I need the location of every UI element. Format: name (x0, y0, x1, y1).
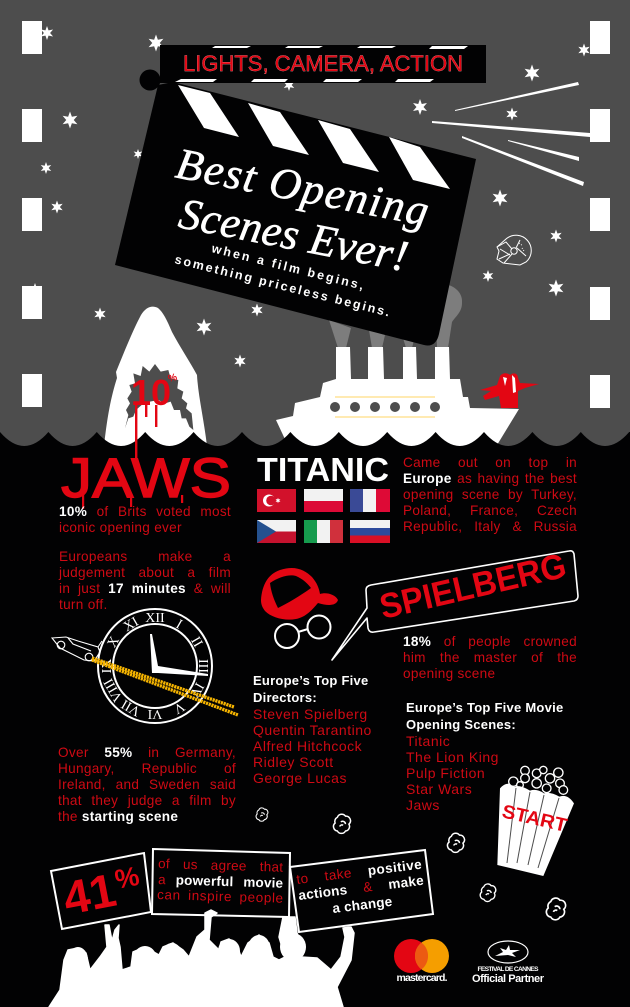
icon: millennium falcon (497, 235, 531, 265)
list: top five opening scenes: Pulp Fiction (406, 765, 485, 781)
text: spielberg stat (403, 634, 577, 681)
list: top five directors: Ridley Scott (253, 754, 334, 770)
list: top five opening scenes: Jaws (406, 797, 440, 813)
sign: powerful movie: a powerful movie (158, 872, 284, 891)
list: top five directors: Quentin Tarantino (253, 722, 372, 738)
logo: mastercard: mastercard. (396, 972, 448, 984)
heading: lights camera action: LIGHTS, CAMERA, ACTION (183, 51, 463, 76)
bloody 10 percent: 10 (131, 372, 171, 413)
text: fifty-five percent: Over 55% in Germany, (58, 745, 236, 760)
title (172, 139, 433, 281)
list: top five opening scenes: Titanic (406, 733, 450, 749)
text: titanic stat: Republic, Italy & Russia (403, 519, 577, 534)
text: fifty-five percent (58, 745, 236, 824)
sign: positive actions (290, 850, 433, 932)
logo: mastercard (394, 939, 449, 984)
bloody 10 percent (131, 372, 178, 462)
box lines (507, 788, 559, 868)
crowd silhouette (49, 910, 354, 1007)
clock numerals: VIII (101, 675, 126, 704)
text: titanic stat: Poland, France, Czech (403, 503, 577, 518)
clock numerals: VI (147, 706, 162, 721)
clapperboard (115, 45, 486, 346)
text: jaws stat: 10% of Brits voted most (59, 504, 231, 519)
clock numerals (100, 611, 210, 721)
heading: jaws: JAWS (61, 446, 231, 509)
ship stripes (335, 397, 435, 417)
text: fifty-five percent: Hungary, Republic of (58, 761, 236, 776)
shark mouth with teeth (125, 364, 193, 430)
clock hands (150, 634, 208, 676)
text: seventeen minutes: judgement about a film (59, 565, 231, 580)
night sky panel (0, 0, 630, 450)
sign: positive actions: actions & make (298, 873, 425, 903)
text: titanic stat: Came out on top in (403, 455, 577, 470)
clock numerals: XI (121, 615, 142, 635)
popcorn box (497, 766, 574, 876)
yellow fire tracks (92, 658, 238, 715)
portholes (330, 402, 440, 412)
list: top five directors: George Lucas (253, 770, 347, 786)
clock numerals: I (173, 617, 185, 633)
clock numerals: VII (119, 696, 143, 718)
logo: festival de cannes (472, 941, 545, 985)
clock numerals: II (187, 634, 205, 650)
clapper arm (160, 45, 486, 83)
clock rings (98, 609, 212, 723)
clock (92, 609, 238, 723)
sign: positive actions: a change (332, 894, 393, 916)
text: seventeen minutes: Europeans make a (59, 549, 231, 564)
clock numerals: IV (186, 680, 206, 700)
sign: 41 percent: % (112, 861, 142, 895)
popped corn (509, 766, 568, 794)
text: fifty-five percent: that they judge a film by (58, 793, 236, 808)
list: top five directors: Directors: (253, 690, 317, 705)
list: top five directors: Europe’s Top Five (253, 673, 368, 688)
sign: powerful movie: of us agree that (158, 856, 284, 875)
clock numerals: X (105, 634, 123, 650)
subtitle: something priceless begins. (173, 252, 391, 319)
list: top five directors (253, 673, 372, 786)
text: titanic stat (403, 455, 577, 534)
text: titanic stat: Europe as having the best (403, 471, 577, 486)
bloody 10 percent: % (167, 372, 178, 385)
cap (261, 568, 338, 620)
text: fifty-five percent: Ireland, and Sweden said (58, 777, 236, 792)
text: jaws stat (59, 504, 231, 535)
flag: poland (304, 489, 343, 512)
list: top five opening scenes (406, 700, 563, 813)
text: spielberg stat: opening scene (403, 666, 495, 681)
text: seventeen minutes (58, 549, 231, 612)
title: Scenes Ever! (175, 189, 412, 281)
cap panel (270, 575, 311, 608)
shark body (104, 307, 207, 446)
logo: festival de cannes: FESTIVAL DE CANNES (478, 966, 539, 973)
bubble outline (332, 551, 578, 660)
board body (115, 82, 476, 346)
list: top five directors: Steven Spielberg (253, 706, 368, 722)
board stripes (178, 85, 450, 189)
title: Best Opening (172, 139, 433, 236)
clock numerals: XII (145, 611, 165, 626)
clock numerals: IX (100, 659, 115, 673)
list: top five opening scenes: Opening Scenes: (406, 717, 516, 732)
text: fifty-five percent: the starting scene (58, 809, 178, 824)
projector light beams (432, 82, 590, 186)
popcorn kernels (256, 808, 566, 920)
couple on the bow (480, 373, 539, 408)
icon: cap and glasses (261, 568, 338, 648)
flag: turkey (257, 489, 296, 512)
stars (30, 26, 590, 368)
flags (257, 489, 390, 543)
sign: powerful movie: can inspire people (157, 887, 283, 906)
ship (276, 347, 539, 450)
box (497, 784, 574, 876)
list: top five directors: Alfred Hitchcock (253, 738, 362, 754)
text: seventeen minutes: turn off. (59, 597, 108, 612)
glasses (275, 616, 330, 648)
icon: delorean car (52, 637, 102, 661)
red dripping blood from shark (135, 440, 137, 460)
text: seventeen minutes: in just 17 minutes & will (59, 581, 231, 596)
bubble text: SPIELBERG (376, 546, 570, 627)
logo: festival de cannes: Official Partner (472, 973, 545, 985)
text: spielberg stat: 18% of people crowned (403, 634, 577, 649)
list: top five opening scenes: The Lion King (406, 749, 499, 765)
sign: 41 percent: 41 (59, 863, 120, 925)
list: top five opening scenes: Star Wars (406, 781, 472, 797)
arm stripes (175, 46, 468, 82)
speech bubble: spielberg (332, 546, 578, 660)
flag: russia (350, 520, 390, 543)
flag: france (350, 489, 390, 512)
text: spielberg stat: him the master of the (403, 650, 577, 665)
sign: positive actions: to take positive (296, 857, 423, 887)
list: top five opening scenes: Europe’s Top Five Movie (406, 700, 563, 715)
sign: 41 percent (51, 853, 151, 929)
ship hull (276, 347, 519, 450)
text: titanic stat: opening scene by Turkey, (403, 487, 577, 502)
text: jaws stat: iconic opening ever (59, 520, 182, 535)
flag: czech republic (257, 520, 296, 543)
clock numerals: III (195, 659, 210, 673)
hinge (140, 70, 160, 90)
start label: START (500, 801, 569, 837)
smoke from funnels (329, 284, 462, 348)
sign: powerful movie (152, 849, 290, 917)
flag: italy (304, 520, 343, 543)
heading: titanic: TITANIC (257, 451, 389, 488)
clock numerals: V (171, 698, 187, 716)
subtitle: when a film begins, (209, 241, 365, 293)
black sea waves (0, 432, 630, 1007)
shark (104, 307, 207, 462)
